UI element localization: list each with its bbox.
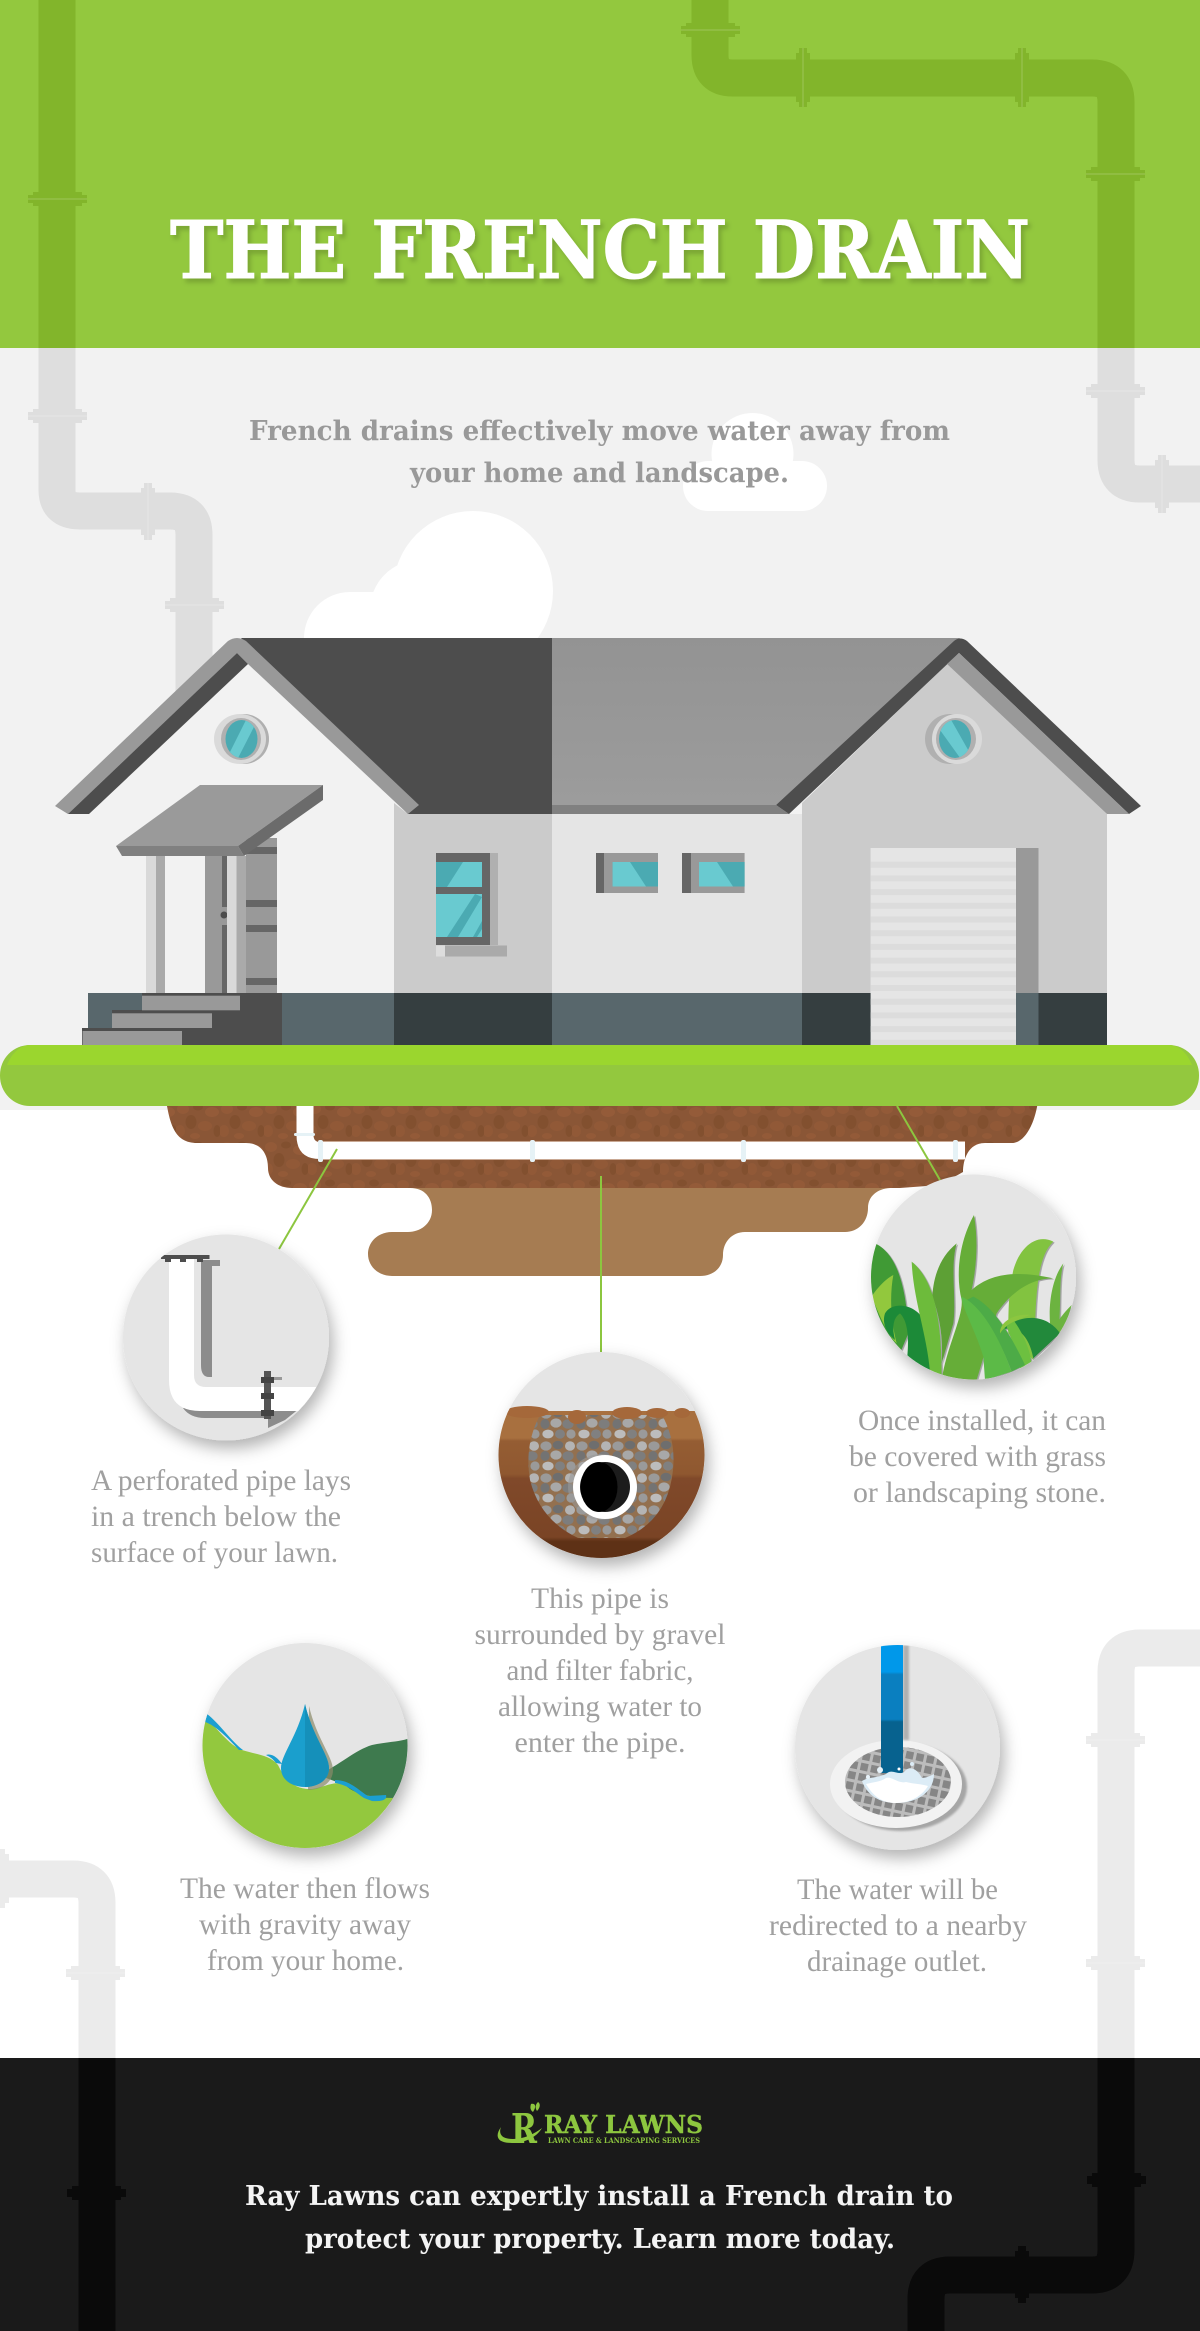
logo: Ray Lawns: R bbox=[511, 2105, 538, 2153]
small window 2 bbox=[682, 853, 745, 893]
foundation bbox=[88, 993, 1107, 1045]
house: right gable inner trim bbox=[947, 653, 1129, 814]
round window left bbox=[214, 714, 269, 764]
house: left wing wall bbox=[394, 803, 552, 993]
text: drainage outlet: redirected to a nearby bbox=[769, 1909, 1027, 1942]
text: perforated pipe: in a trench below the bbox=[91, 1500, 341, 1533]
grass ground strip bbox=[0, 1045, 1199, 1106]
icon: gravel cross-section circle bbox=[495, 1352, 710, 1561]
house: right gable trim bbox=[776, 638, 1141, 814]
house: left gable trim bbox=[55, 638, 419, 814]
side window bbox=[436, 853, 507, 956]
logo: Ray Lawns bbox=[498, 2102, 703, 2153]
text: grass bbox=[849, 1404, 1106, 1509]
text: drainage outlet: drainage outlet. bbox=[807, 1945, 987, 1978]
footer band bbox=[0, 2058, 1200, 2331]
text: drainage outlet bbox=[769, 1873, 1027, 1978]
porch columns and door bbox=[146, 856, 246, 993]
text: gravity flow bbox=[180, 1872, 430, 1977]
text: gravel: and filter fabric, bbox=[506, 1654, 694, 1687]
intro text: your home and landscape. bbox=[409, 458, 789, 489]
title: THE FRENCH DRAIN bbox=[170, 203, 1030, 297]
house: left gable inner trim bbox=[68, 653, 248, 814]
text: gravel: This pipe is bbox=[531, 1582, 669, 1615]
house: roof eave bbox=[552, 805, 789, 814]
small window 1 bbox=[596, 853, 658, 893]
footer call to action text: Ray Lawns can expertly install a French drain to bbox=[245, 2181, 953, 2212]
text: grass: Once installed, it can bbox=[858, 1404, 1106, 1437]
house: left gable wall bbox=[88, 664, 394, 993]
text: drainage outlet: The water will be bbox=[797, 1873, 998, 1906]
front steps bbox=[82, 993, 282, 1045]
garage door bbox=[871, 848, 1016, 1045]
text: perforated pipe: A perforated pipe lays bbox=[91, 1464, 351, 1497]
text: perforated pipe: surface of your lawn. bbox=[91, 1536, 338, 1569]
icon: water drop on hill circle bbox=[190, 1643, 420, 1860]
text: gravel: enter the pipe. bbox=[514, 1726, 686, 1759]
house: light roof section bbox=[552, 638, 960, 805]
house: right gable wall bbox=[802, 664, 1107, 993]
text: gravity flow: with gravity away bbox=[199, 1908, 411, 1941]
round window right bbox=[925, 714, 982, 764]
cloud behind house bbox=[304, 511, 553, 684]
text: grass: be covered with grass bbox=[849, 1440, 1106, 1473]
text: gravel: surrounded by gravel bbox=[474, 1618, 726, 1651]
porch door wall panel bbox=[246, 838, 277, 993]
soil lower tan layer bbox=[368, 1188, 892, 1276]
background: white section bbox=[0, 1110, 1200, 2058]
text: gravity flow: from your home. bbox=[207, 1944, 404, 1977]
text: perforated pipe bbox=[91, 1464, 351, 1569]
intro text bbox=[249, 416, 950, 489]
porch roof bbox=[116, 785, 323, 856]
header band bbox=[0, 0, 1200, 348]
footer call to action text bbox=[245, 2181, 953, 2255]
perforated pipe in trench bbox=[294, 1100, 965, 1162]
garage door frame bbox=[1016, 848, 1038, 993]
soil upper layer bbox=[166, 1100, 1038, 1188]
leader line to pipe circle bbox=[279, 1149, 337, 1249]
text: gravel: allowing water to bbox=[498, 1690, 702, 1723]
intro text: French drains effectively move water away from bbox=[249, 416, 950, 447]
text: grass: or landscaping stone. bbox=[853, 1476, 1106, 1509]
leader line to grass circle bbox=[897, 1106, 940, 1180]
footer call to action text: protect your property. Learn more today. bbox=[305, 2224, 895, 2255]
house: dark roof section bbox=[241, 638, 552, 814]
icon: pipe circle bbox=[123, 1234, 335, 1440]
background: light grey section bbox=[0, 348, 1200, 1110]
logo: Ray Lawns: RAY LAWNS bbox=[544, 2110, 703, 2139]
cloud behind intro text bbox=[683, 413, 827, 511]
logo: Ray Lawns: LAWN CARE & LANDSCAPING SERVICES bbox=[548, 2136, 700, 2145]
text: gravity flow: The water then flows bbox=[180, 1872, 430, 1905]
leader line to gravel circle bbox=[600, 1176, 602, 1352]
text: gravel bbox=[474, 1582, 726, 1759]
house: middle wall bbox=[552, 814, 802, 993]
icon: drain outlet circle bbox=[795, 1645, 1000, 1850]
icon: grass circle bbox=[868, 1174, 1076, 1380]
house illustration bbox=[55, 638, 1141, 1045]
